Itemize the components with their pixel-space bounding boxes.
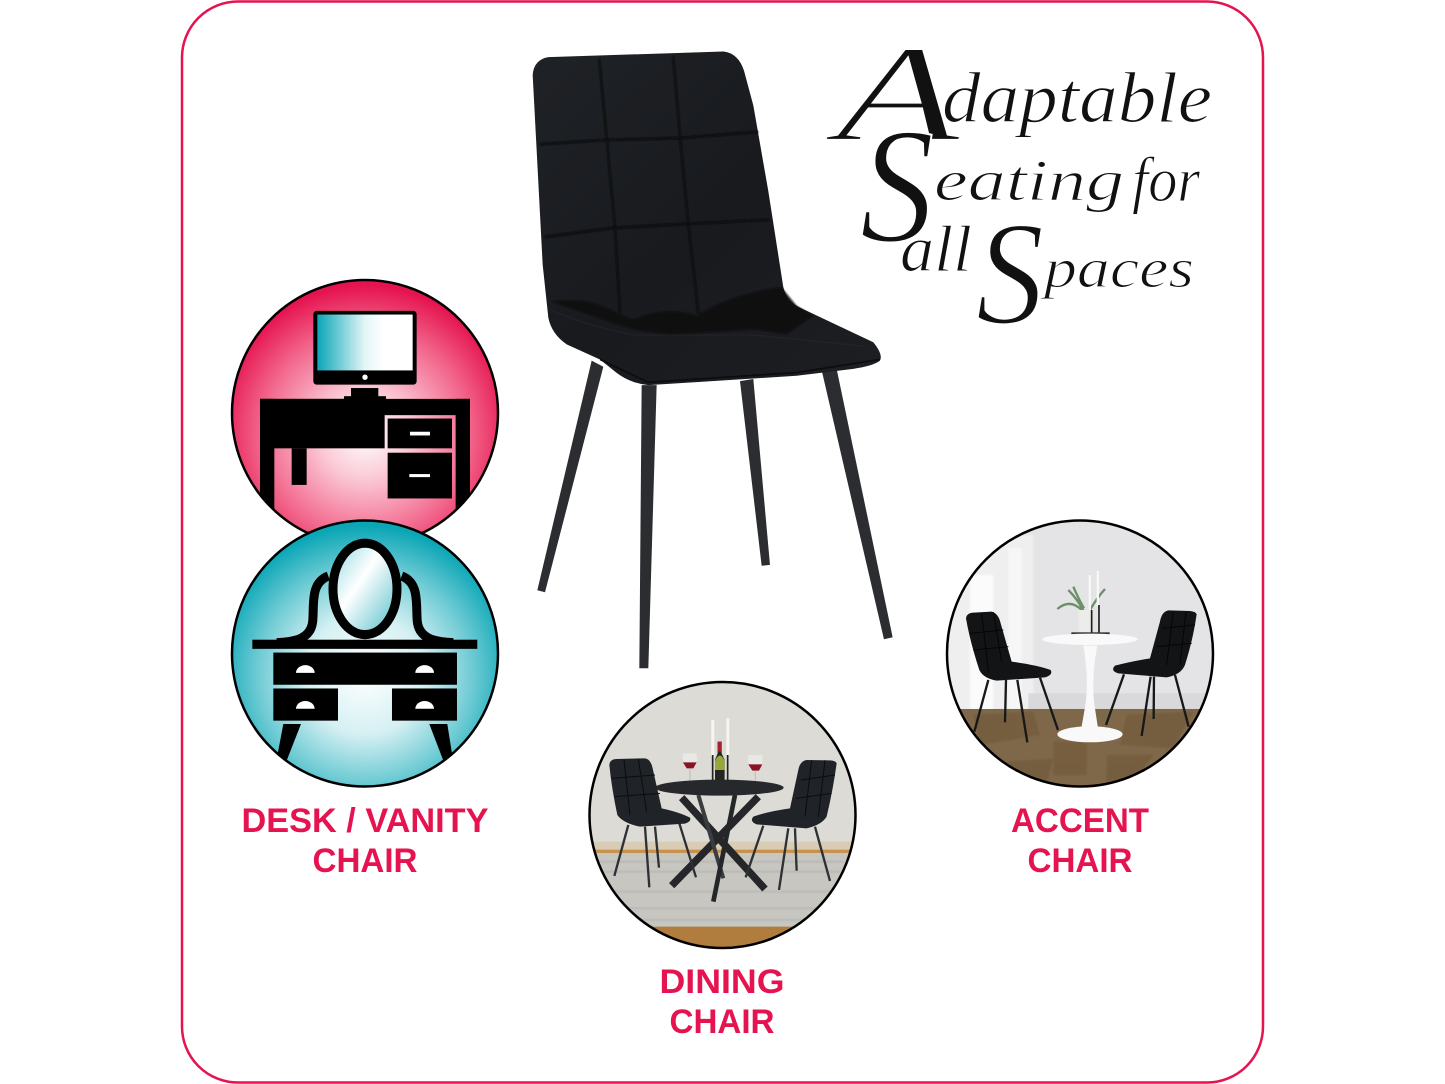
label: dining chair xyxy=(660,963,784,1041)
label: desk / vanity chair: CHAIR xyxy=(312,842,418,880)
left chair xyxy=(966,612,1058,742)
title line 1 xyxy=(824,17,1212,170)
label: desk / vanity chair: DESK / VANITY xyxy=(242,802,489,840)
drawer handles xyxy=(296,665,434,709)
title line 3 xyxy=(900,192,1194,356)
monitor xyxy=(313,311,417,400)
title line 2: for xyxy=(1132,144,1201,215)
label: desk / vanity chair xyxy=(242,802,489,880)
label: dining chair: CHAIR xyxy=(670,1003,774,1041)
legs xyxy=(277,724,452,762)
title line 2 xyxy=(860,94,1201,277)
room background xyxy=(590,683,854,842)
title line 1: A xyxy=(824,17,961,170)
photo: black velvet dining chair xyxy=(533,51,893,668)
icon: vanity table in teal circle xyxy=(232,520,498,786)
chair tufted seams xyxy=(541,57,768,313)
panel: rounded frame xyxy=(182,2,1263,1082)
title line 3: all xyxy=(900,213,972,286)
plant and candles xyxy=(1057,571,1110,638)
mirror arms xyxy=(277,576,453,643)
chair legs xyxy=(537,361,893,668)
title line 2: S xyxy=(860,94,934,277)
desk xyxy=(260,399,470,514)
floor herringbone xyxy=(973,712,1193,785)
drawers xyxy=(273,653,457,721)
right chair xyxy=(746,760,837,890)
label: dining chair: DINING xyxy=(660,963,784,1001)
right chair xyxy=(1106,610,1197,736)
table top xyxy=(252,640,477,649)
icon: computer desk in red circle xyxy=(232,280,498,546)
wine glasses xyxy=(683,754,762,781)
title: Adaptable Seating for all Spaces xyxy=(824,17,1212,356)
title line 1: daptable xyxy=(942,58,1212,138)
title line 2: eating xyxy=(934,148,1124,213)
room background xyxy=(1022,522,1212,694)
table xyxy=(655,780,784,902)
title line 3: paces xyxy=(1039,238,1194,300)
chair shell xyxy=(533,51,881,385)
white pedestal table xyxy=(1042,634,1138,742)
title line 3: S xyxy=(976,192,1044,356)
photo circle: accent chairs xyxy=(940,515,1225,796)
label: accent chair: ACCENT xyxy=(1011,802,1149,840)
left chair xyxy=(609,758,696,887)
chair seat crease xyxy=(552,287,813,335)
candles and bottle xyxy=(711,718,729,785)
label: accent chair xyxy=(1011,802,1149,880)
photo circle: dining room xyxy=(580,675,865,957)
oval mirror xyxy=(333,543,397,635)
label: accent chair: CHAIR xyxy=(1028,842,1132,880)
